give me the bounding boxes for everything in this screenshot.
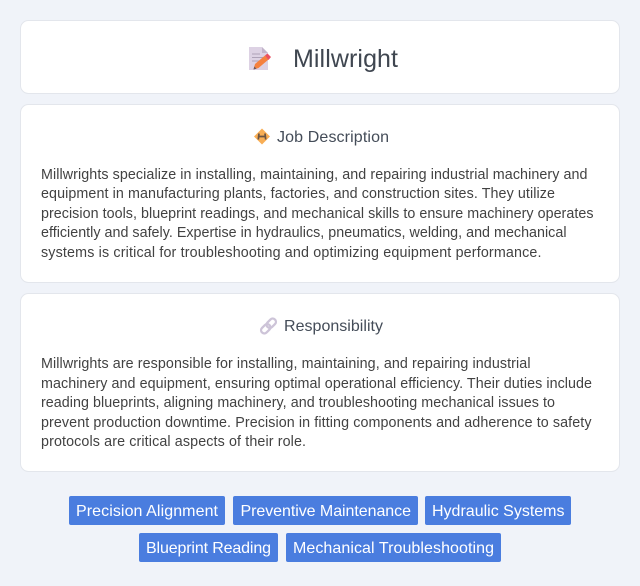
tag: Precision Alignment <box>69 496 225 525</box>
tag: Blueprint Reading: Blueprint Reading <box>146 540 271 557</box>
panel: title <box>20 20 620 94</box>
heading: job description: Job Description <box>277 129 389 146</box>
text block: job description <box>41 167 594 261</box>
tag: Blueprint Reading <box>139 533 278 562</box>
tag: Precision Alignment: Precision Alignment <box>76 503 219 520</box>
text block: job description: systems is critical for troubleshooting and optimizing equipment performance. <box>41 245 542 261</box>
icon: document with pencil <box>249 47 271 70</box>
tag: Hydraulic Systems <box>425 496 571 525</box>
text block: job description: Millwrights specialize in installing, maintaining, and repairing industrial machinery and <box>41 167 588 183</box>
text block: job description: equipment in manufacturing plants, factories, and construction sites. They utilize <box>41 186 555 202</box>
text block: responsibility: prevent production downtime. Precision in fitting components and adherence to safety <box>41 415 592 431</box>
text block: job description: precision tools, blueprint readings, and mechanical skills to ensure machinery operates <box>41 206 594 222</box>
text block: responsibility: reading blueprints, aligning machinery, and troubleshooting mechanical issues to <box>41 395 555 411</box>
text block: job description: efficiently and safely. Expertise in hydraulics, pneumatics, welding, and mechanical <box>41 225 566 241</box>
tag: Preventive Maintenance <box>233 496 418 525</box>
heading: Millwright: Millwright <box>293 45 398 73</box>
text block: responsibility <box>41 356 592 450</box>
heading: responsibility: Responsibility <box>284 318 383 335</box>
icon: diamond road sign <box>254 128 270 144</box>
panel: responsibility <box>20 294 620 472</box>
tag: Mechanical Troubleshooting <box>286 533 501 562</box>
text block: responsibility: Millwrights are responsible for installing, maintaining, and repairing industrial <box>41 356 530 372</box>
tag: Preventive Maintenance: Preventive Maintenance <box>240 503 411 520</box>
panel: job description <box>20 104 620 282</box>
icon: link <box>260 317 277 335</box>
text block: responsibility: machinery and equipment, ensuring optimal operational efficiency. Their duties include <box>41 376 592 392</box>
text block: responsibility: protocols are critical aspects of their role. <box>41 434 306 450</box>
tag: Mechanical Troubleshooting: Mechanical Troubleshooting <box>293 540 494 557</box>
tag: Hydraulic Systems: Hydraulic Systems <box>432 503 564 520</box>
